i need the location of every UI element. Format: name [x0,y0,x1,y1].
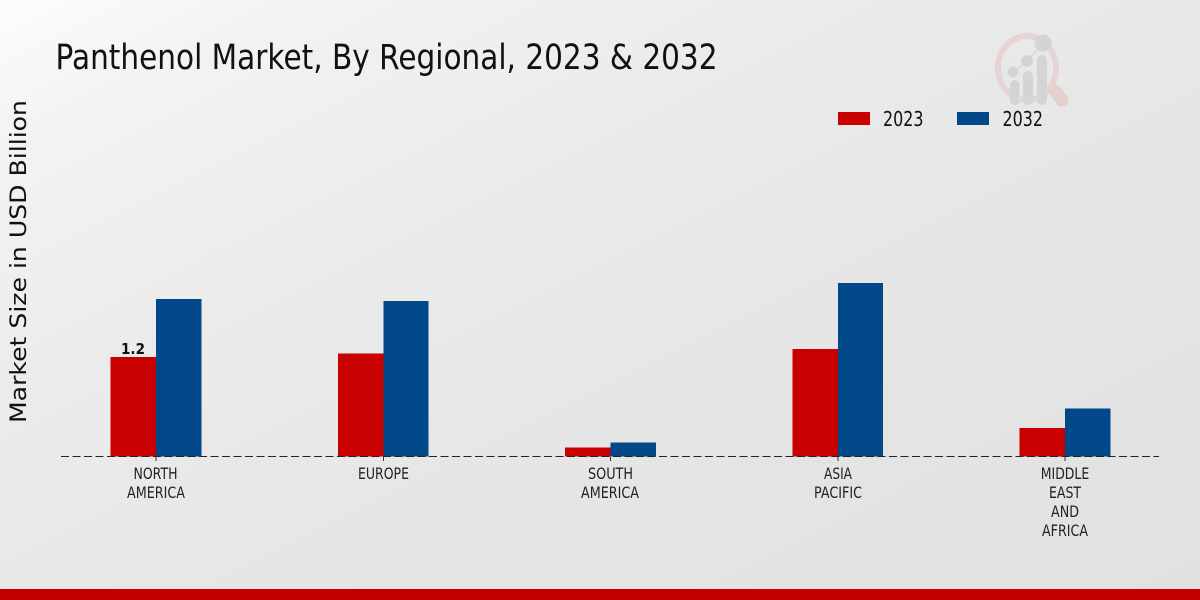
bars: North America [110,299,202,456]
bar chart [61,283,1159,461]
bars: Europe [338,301,428,456]
bars: Middle East and Africa [1020,408,1110,456]
label: South America: SOUTH [588,464,633,483]
legend item: 2023 [838,107,924,131]
label: Middle East and Africa: MIDDLE [1041,464,1089,483]
x axis labels [127,464,1089,540]
title: Panthenol Market, By Regional, 2023 & 2032 [56,38,718,78]
label: Asia Pacific: PACIFIC [814,483,862,502]
label: South America: AMERICA [581,483,639,502]
icon: watermark logo [998,34,1062,105]
value label: 1.2: 1.2 [121,340,145,358]
label: Middle East and Africa: AND [1051,502,1079,521]
label: North America [127,464,185,502]
bars: South America [565,442,656,456]
label: South America [581,464,639,502]
legend item: 2032: 2032 [1002,107,1043,131]
bars: Asia Pacific [792,283,883,456]
x axis baseline [61,456,1159,458]
legend [838,107,1043,131]
y axis label: Market Size in USD Billion [6,100,32,423]
footer bar [0,589,1200,600]
label: Middle East and Africa: EAST [1049,483,1081,502]
label: Asia Pacific [814,464,862,502]
label: Middle East and Africa [1041,464,1089,540]
legend item: 2023: 2023 [883,107,924,131]
label: Asia Pacific: ASIA [824,464,852,483]
legend item: 2032 [957,107,1043,131]
label: Europe: EUROPE [358,464,409,483]
label: North America: NORTH [134,464,178,483]
label: North America: AMERICA [127,483,185,502]
label: Middle East and Africa: AFRICA [1042,521,1088,540]
